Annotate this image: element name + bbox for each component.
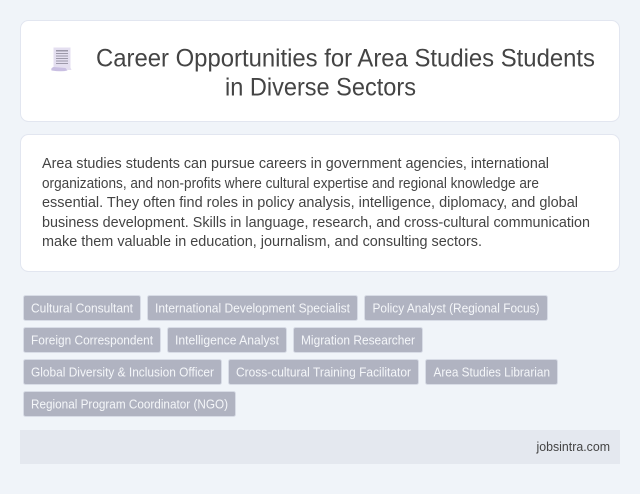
tags: career roles <box>24 296 558 416</box>
tag: Regional Program Coordinator: Regional Program Coordinator (NGO) <box>31 396 228 412</box>
title <box>96 44 595 102</box>
title: in Diverse Sectors <box>225 74 416 102</box>
tag: International Development Specialist: International Development Specialist <box>155 300 350 316</box>
text block: summary paragraph <box>42 155 590 250</box>
tag: Global Diversity & Inclusion Officer: Global Diversity & Inclusion Officer <box>31 364 215 380</box>
icon: document scroll <box>51 48 72 71</box>
tag: Migration Researcher: Migration Researcher <box>301 332 416 348</box>
tag: Cross-cultural Training Facilitator: Cross-cultural Training Facilitator <box>236 364 412 380</box>
tag: Migration Researcher <box>294 328 422 352</box>
tag: Area Studies Librarian <box>426 360 558 384</box>
tag: International Development Specialist <box>148 296 358 320</box>
text block: summary paragraph: make them valuable in education, journalism, and consulting sectors. <box>42 233 482 250</box>
tag: Intelligence Analyst <box>168 328 286 352</box>
tag: Cultural Consultant <box>24 296 140 320</box>
text block: summary paragraph: organizations, and non-profits where cultural expertise and regional knowledge are <box>42 175 539 192</box>
text block: summary paragraph: Area studies students can pursue careers in government agencies, international <box>42 155 549 172</box>
footer bar <box>20 430 620 464</box>
footer text: site name: jobsintra.com <box>536 439 610 454</box>
tag: Area Studies Librarian: Area Studies Librarian <box>434 364 550 380</box>
tag: Intelligence Analyst: Intelligence Analyst <box>175 332 279 348</box>
panel: summary text card <box>20 134 620 272</box>
tag: Policy Analyst <box>364 296 548 320</box>
tag: Regional Program Coordinator <box>24 392 236 416</box>
tag: Foreign Correspondent <box>24 328 160 352</box>
text block: summary paragraph: essential. They often find roles in policy analysis, intelligence, diplomacy, and global <box>42 194 578 211</box>
panel: header card <box>20 20 620 122</box>
tag: Global Diversity & Inclusion Officer <box>24 360 222 384</box>
tag: Policy Analyst: Policy Analyst (Regional Focus) <box>372 300 540 316</box>
title: Career Opportunities for Area Studies Students <box>96 44 595 72</box>
tag: Cross-cultural Training Facilitator <box>228 360 418 384</box>
tag: Cultural Consultant: Cultural Consultant <box>31 300 133 316</box>
tag: Foreign Correspondent: Foreign Correspondent <box>31 332 153 348</box>
text block: summary paragraph: business development. Skills in language, research, and cross-cultural communication <box>42 214 590 231</box>
